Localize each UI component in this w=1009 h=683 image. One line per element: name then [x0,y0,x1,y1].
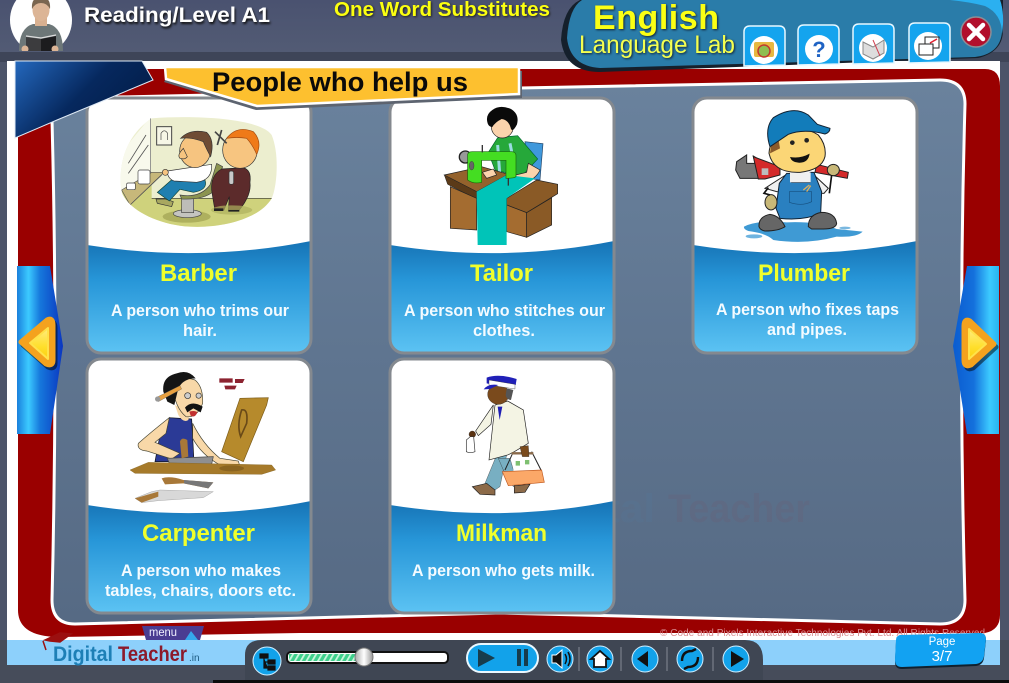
copyright: © Code and Pixels Interactive Technologies Pvt. Ltd. All Rights Reserved [660,628,985,639]
avatar: person reading [10,0,72,53]
progress slider [287,648,448,666]
tool button: history [744,26,785,66]
title: Tailor: Tailor [470,260,533,287]
back button [632,646,658,672]
tool button: help [798,25,839,65]
header: reading level: Reading/Level A1 [84,4,270,27]
page indicator [895,633,986,669]
tool button: book [853,24,894,64]
description: Barber [111,301,289,340]
logo: Digital Teacher: Teacher [118,643,187,666]
light blue footer strip [7,640,1000,665]
tool button: help: ? [812,37,826,62]
title: Barber: Barber [160,260,237,287]
description: Barber: hair. [183,321,217,340]
card: Barber [87,98,311,353]
control bar [245,640,763,683]
menu tab [142,626,204,640]
page indicator: Page [929,636,955,648]
description: Tailor [404,301,605,340]
watermark: Digital Teacher: Digital [527,487,655,531]
description: Plumber: A person who fixes taps [716,300,899,319]
card: Milkman [390,359,614,613]
subtitle: Language Lab: Language Lab [579,31,735,59]
description: Tailor: clothes. [473,321,535,340]
title: Plumber: Plumber [758,260,850,287]
heading banner [164,67,522,110]
close button [961,17,991,47]
logo: Digital Teacher [43,633,200,666]
logo: Digital Teacher: Digital [53,643,113,666]
title: English: English [593,0,719,37]
card: Plumber [693,98,917,353]
tool button: windows [909,23,950,63]
illustration: carpenter [130,372,276,503]
English Language Lab panel [561,0,1003,72]
next button [723,646,749,672]
card: Tailor [390,98,614,353]
left arrow glyph [21,319,55,368]
description: Milkman: A person who gets milk. [412,561,595,580]
right arrow glyph [964,320,996,369]
title: Carpenter: Carpenter [142,520,255,547]
watermark: Digital Teacher [527,487,810,531]
description: Tailor: A person who stitches our [404,301,605,320]
heading text: People who help us [212,67,468,97]
tree button [253,647,281,675]
content panel [52,80,965,624]
description: Carpenter: tables, chairs, doors etc. [105,581,296,600]
description: Barber: A person who trims our [111,301,289,320]
illustration: plumber [736,111,863,242]
page indicator: 3/7 [932,648,952,665]
description: Carpenter [105,561,296,600]
description: Carpenter: A person who makes [121,561,281,580]
illustration: tailor [444,107,558,245]
refresh button [677,646,703,672]
watermark: Digital Teacher: Teacher [668,487,810,531]
home button [587,646,613,672]
logo: Digital Teacher: .in [189,653,200,664]
left arrow [17,266,63,434]
description: Plumber [716,300,899,339]
sound button [547,646,573,672]
title: Milkman: Milkman [456,520,547,547]
navy corner triangle [15,61,153,138]
illustration: milkman [466,376,544,495]
description: Plumber: and pipes. [767,320,847,339]
menu tab: menu [149,627,177,639]
play pause pill [467,644,538,672]
illustration: barber [120,117,277,227]
right arrow [953,266,999,434]
card: Carpenter [87,359,311,613]
